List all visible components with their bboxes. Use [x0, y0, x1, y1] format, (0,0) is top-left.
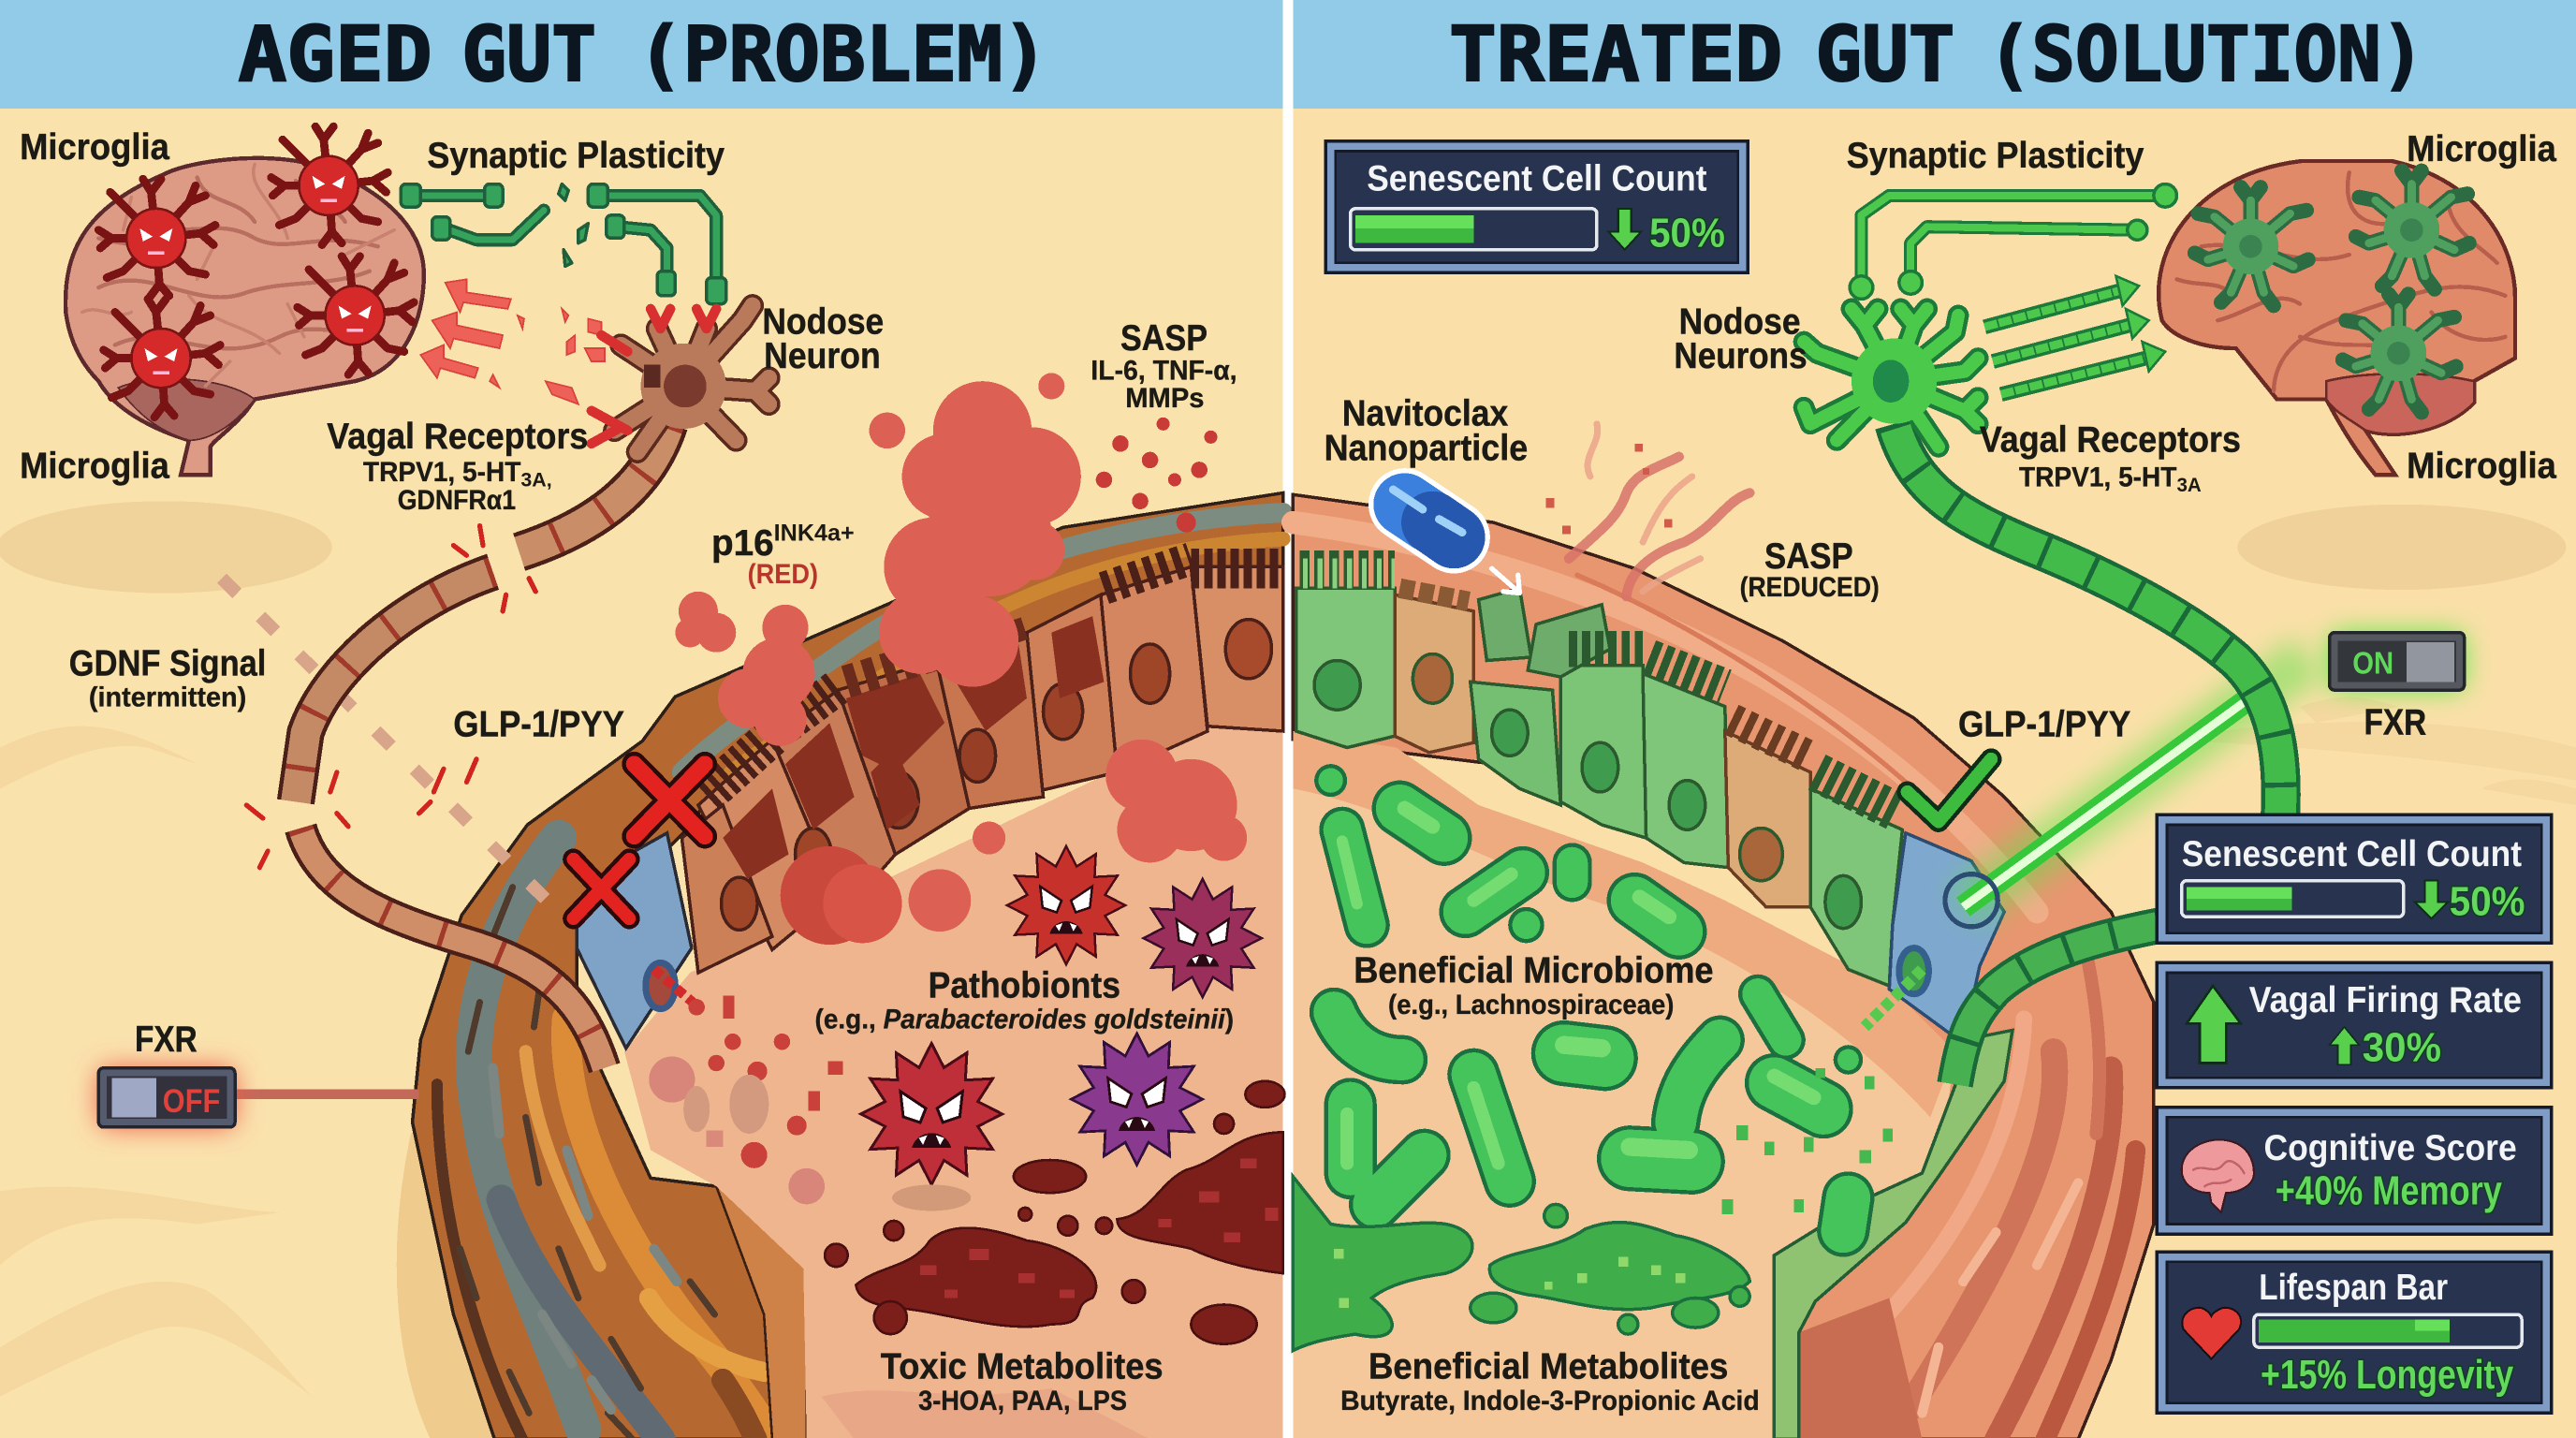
label: toxic metabolites: 3-HOA, PAA, LPS [918, 1386, 1127, 1416]
icon: heart [2182, 1308, 2241, 1358]
red fragments from L-cell [654, 969, 696, 1005]
label: p16: (RED) [748, 559, 818, 590]
label: p16: p16 [711, 523, 774, 564]
label: pathobionts: Pathobionts [929, 965, 1120, 1005]
label: nodose neurons: Neurons [1674, 336, 1808, 376]
aged epithelial cells [681, 566, 1283, 973]
stat panel: lifespan bar [2156, 1251, 2553, 1415]
pathobiont: red large [861, 1043, 1003, 1184]
value: +40% Memory [2276, 1167, 2502, 1213]
broken synaptic circuit [401, 184, 726, 304]
value: 30% [2363, 1025, 2441, 1071]
red X marks [574, 764, 705, 918]
label: GDNF signal [69, 643, 266, 713]
green mucosa layer [1774, 1030, 2012, 1438]
FXR off line [235, 1090, 419, 1099]
label: FXR: FXR [135, 1020, 198, 1060]
label: beneficial microbiome: Beneficial Microbiome [1354, 951, 1714, 991]
treated brush border [1299, 570, 1899, 814]
FXR off glow [98, 1068, 235, 1127]
label: vagal receptors: Vagal Receptors [1980, 420, 2241, 461]
SASP cloud and p16 blobs [675, 373, 1247, 945]
label: toxic metabolites: Toxic Metabolites [881, 1346, 1164, 1387]
check mark [1908, 759, 1991, 822]
header bar: aged gut [0, 0, 1283, 109]
title: treated gut solution: (SOLUTION) [1988, 11, 2424, 99]
label: vagal receptors [1980, 420, 2241, 496]
lumen debris [649, 996, 842, 1204]
icon: red microglia on brain [98, 126, 414, 418]
stat panel: cognitive score [2156, 1106, 2553, 1236]
stat panel: senescent cell count top [1325, 139, 1749, 274]
icon: down arrow [2415, 881, 2448, 918]
stat panel: senescent cell count [2156, 814, 2553, 945]
nerve: middle broken segment [296, 572, 493, 801]
label: GLP-1/PYY: GLP-1/PYY [1958, 704, 2131, 744]
aged gut wall [413, 493, 1283, 1438]
panel: aged gut illustration [413, 373, 1284, 1438]
progress bar [2254, 1314, 2522, 1347]
toggle: FXR off [98, 1068, 235, 1127]
reduced SASP particles [1546, 444, 1673, 534]
label: GDNF signal: (intermitten) [89, 682, 246, 713]
icon: small up arrow [2330, 1027, 2359, 1064]
title: treated gut solution: GUT [1815, 11, 1955, 99]
aged brush border [707, 559, 1283, 795]
icon: green microglia on brain [2195, 171, 2469, 413]
label: GLP-1/PYY: GLP-1/PYY [453, 704, 624, 744]
label: vagal receptors: TRPV1, 5-HT [2019, 462, 2176, 492]
L-cell nucleus [646, 962, 675, 1009]
value: 50% [1649, 210, 1725, 256]
label: vagal receptors: GDNFRα1 [398, 485, 516, 516]
toggle: FXR on: ON [2352, 647, 2393, 682]
labels: aged gut [20, 127, 1237, 1416]
metabolite stain shading [822, 1388, 1150, 1438]
label: vagal receptors: 3A, [520, 469, 552, 491]
label: GDNF signal: GDNF Signal [69, 643, 266, 683]
nerve: treated main [1895, 424, 2281, 818]
synaptic circuit restored [1850, 184, 2176, 299]
icon: navitoclax pill [1393, 490, 1519, 594]
title: aged gut problem: GUT [461, 11, 596, 99]
beneficial bacteria [1331, 781, 1848, 1231]
label: vagal receptors: 3A [2176, 475, 2202, 496]
nerve: lower segment into gut [300, 829, 605, 1068]
label: vagal receptors [327, 417, 588, 516]
label: pathobionts [815, 965, 1234, 1035]
label: vagal receptors: TRPV1, 5-HT [363, 457, 520, 488]
icon: large up arrow [2187, 986, 2241, 1064]
X large [634, 764, 705, 836]
label: pathobionts: (e.g., Parabacteroides goldsteinii) [815, 1005, 1234, 1035]
nerve: treated lower [1955, 925, 2162, 1084]
title: treated gut solution: TREATED [1449, 11, 1782, 99]
treated gut wall [1293, 494, 2154, 1438]
label: SASP reduced: (REDUCED) [1740, 572, 1880, 603]
label: synaptic plasticity: Synaptic Plasticity [1847, 136, 2144, 176]
green debris squares [1721, 1068, 1893, 1214]
beneficial metabolite pools [1293, 1177, 1749, 1351]
L-cell blue [577, 833, 692, 1049]
pill arrow [1492, 568, 1519, 594]
progress bar [1351, 209, 1597, 250]
pathobiont: purple large [1071, 1034, 1203, 1165]
labels: treated gut [1325, 129, 2556, 1416]
toggle: FXR on [2330, 633, 2465, 690]
panel: treated gut illustration [1293, 494, 2154, 1438]
label: navitoclax nanoparticle: Nanoparticle [1325, 428, 1528, 468]
treated gut lumen [1293, 731, 1955, 1438]
label: nodose neuron: Neuron [764, 336, 881, 376]
FXR laser beam [1963, 657, 2308, 907]
green release [1865, 969, 1922, 1027]
title: aged gut problem: (PROBLEM) [637, 11, 1048, 99]
nerve break sparks [246, 526, 535, 868]
label: SASP reduced: SASP [1764, 536, 1853, 577]
value: 50% [2450, 879, 2525, 925]
label: toxic metabolites [881, 1346, 1164, 1416]
label: beneficial metabolites [1340, 1346, 1760, 1416]
icon: aged brain [66, 158, 424, 475]
aged gut lumen [624, 690, 1283, 1438]
title: Lifespan Bar [2259, 1268, 2448, 1308]
label: microglia top: Microglia [20, 127, 169, 168]
pathobiont: red small [1007, 846, 1125, 964]
header bar: treated gut [1293, 0, 2576, 109]
label: nodose neurons: Nodose [1679, 301, 1801, 342]
label: p16: INK4a+ [774, 521, 855, 546]
label: navitoclax nanoparticle: Navitoclax [1342, 394, 1509, 434]
label: SASP: IL-6, TNF-α, [1090, 355, 1237, 386]
title: aged gut problem: AGED [239, 11, 432, 99]
label: nodose neurons [1674, 301, 1808, 376]
label: SASP: MMPs [1125, 383, 1204, 414]
nerve: upper intact segment [520, 424, 668, 552]
title: Vagal Firing Rate [2249, 980, 2522, 1020]
label: FXR: FXR [2364, 702, 2426, 742]
X small [574, 859, 629, 918]
neuron: aged nodose [592, 305, 768, 452]
label: p16 [711, 521, 855, 590]
reduced SASP wisps [1569, 424, 1749, 596]
label: microglia bottom: Microglia [20, 447, 169, 487]
title: Senescent Cell Count [2182, 834, 2522, 874]
label: beneficial metabolites: Beneficial Metabolites [1368, 1346, 1728, 1387]
label: beneficial microbiome: (e.g., Lachnospiraceae) [1388, 990, 1674, 1020]
SASP droplets [1096, 418, 1218, 533]
label: SASP reduced [1740, 536, 1880, 603]
FXR on glow [2330, 633, 2465, 690]
stat panel: vagal firing rate [2156, 961, 2553, 1090]
value: +15% Longevity [2261, 1352, 2514, 1398]
lumen shaded band [1293, 731, 1955, 1117]
green signal arrows to brain [1984, 276, 2165, 394]
label: nodose neuron [762, 301, 884, 376]
label: beneficial metabolites: Butyrate, Indole-3-Propionic Acid [1340, 1386, 1760, 1416]
label: navitoclax nanoparticle [1325, 394, 1528, 468]
label: nodose neuron: Nodose [762, 301, 884, 342]
title: Cognitive Score [2263, 1128, 2517, 1168]
neuron: green nodose [1804, 309, 1978, 447]
icon: down arrow [1608, 209, 1641, 250]
laser receptor ring [1945, 874, 1998, 927]
label: synaptic plasticity: Synaptic Plasticity [427, 136, 725, 176]
label: beneficial microbiome [1354, 951, 1714, 1020]
pathobiont: purple small [1144, 879, 1262, 997]
toggle: FXR off: OFF [163, 1083, 220, 1120]
icon: healthy brain [2159, 161, 2515, 475]
L-cell nucleus [1899, 948, 1928, 994]
label: SASP: SASP [1120, 318, 1208, 359]
treated epithelial cells [1296, 588, 1902, 986]
label: microglia top: Microglia [2407, 129, 2556, 169]
cell damage patches [723, 616, 1104, 879]
icon: small brain [2182, 1139, 2254, 1212]
label: vagal receptors: Vagal Receptors [327, 417, 588, 457]
progress bar [2182, 881, 2404, 917]
GDNF dashed signal [222, 579, 567, 920]
toxic metabolite pools [825, 1081, 1284, 1344]
title: Senescent Cell Count [1367, 159, 1707, 199]
label: SASP [1090, 318, 1237, 414]
pathobiont shadow [892, 1184, 971, 1211]
label: microglia bottom: Microglia [2407, 447, 2556, 487]
red signal arrows to brain [420, 279, 605, 404]
L-cell blue [1889, 833, 2004, 1043]
